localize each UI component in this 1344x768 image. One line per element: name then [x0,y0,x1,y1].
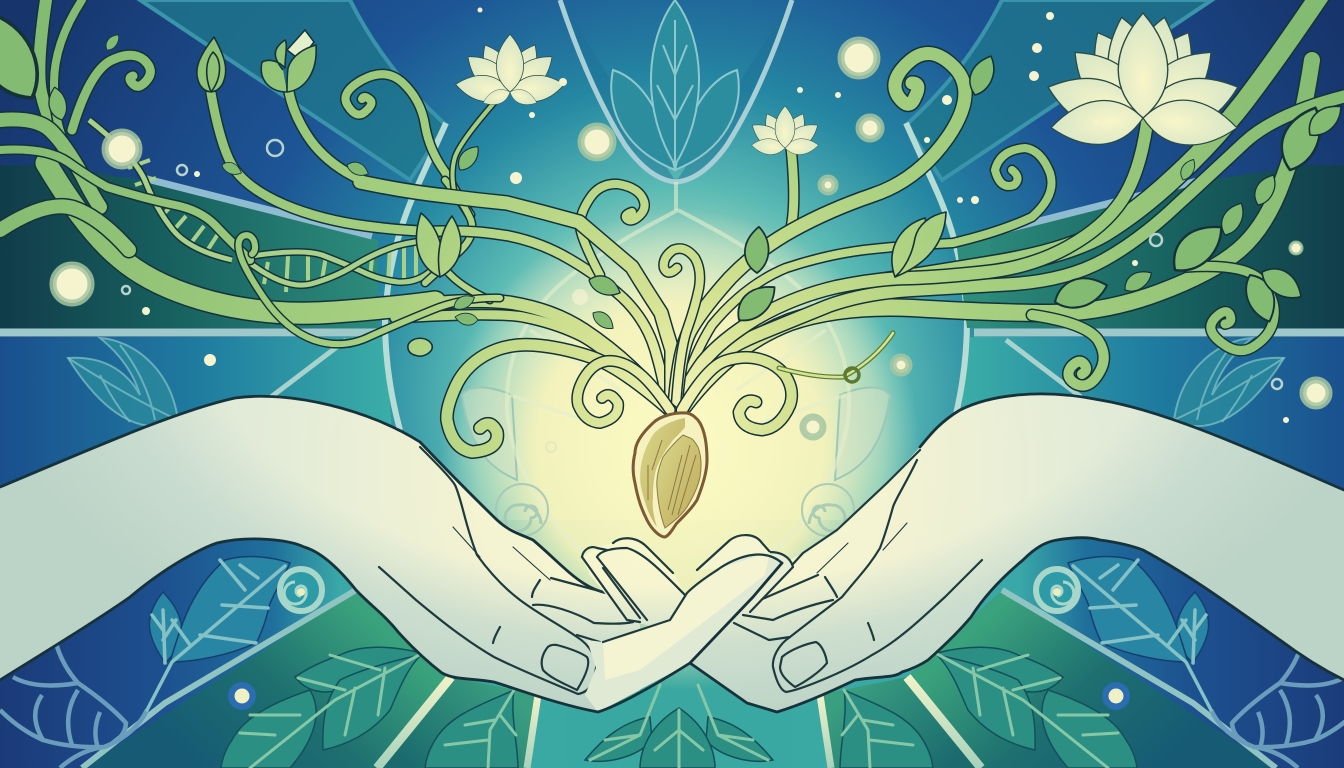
ornament: right spiral [802,484,854,536]
leaves: left pair [416,213,461,277]
pane: right band inner extension [956,232,990,328]
buds: closed flower buds [197,30,432,356]
ornament: left spiral [496,484,548,536]
glow: central light [425,150,935,710]
panels: upper stained glass panes, left half [0,0,676,540]
leaf: near center [585,685,660,761]
leaf: green leaf lower [425,690,518,768]
ornament: side panes [462,388,890,480]
pane: bottom field [0,520,679,768]
hand: left crossing fingers [0,535,793,712]
orb: blue halo [228,682,256,710]
flower: large lotus right [1041,12,1245,150]
hand: right palm, thumb and fingers [582,394,1344,712]
DNA helix [89,120,440,292]
pane: lower green field [82,590,451,768]
flower: small lotus left [454,34,566,109]
pane: lower blue band [0,337,400,540]
seed [633,413,707,537]
ornament: inner medallion [496,182,854,565]
panels: lower stained glass panes, left half [0,520,679,768]
leaves: right pair [892,212,946,277]
pane: lower teal field [377,677,540,768]
tendril: small right sprout [779,333,893,382]
pane dividers [82,590,538,768]
leaf: bottom center leaf and stem [640,668,715,768]
ornament: spiral [280,569,322,611]
pane: center arch line [385,123,446,430]
vines: outlined growing stems [0,0,1344,452]
leaves: on the vines [0,2,1344,333]
leaf: green leaf upper [221,647,421,768]
pane: teal ray top [140,0,446,180]
panels: lower panes, mirrored right half [679,520,1344,768]
light orbs [53,8,1329,437]
panels: upper panes, mirrored right half [676,0,1344,540]
flower: tiny lotus center [747,106,823,156]
pane: dark green band [0,165,378,328]
leaf: blue leaf pair [147,557,290,710]
leaf: left band blue leaf [68,338,178,426]
hand: left palm and thumb [0,396,640,712]
decoration: navy corner vines [0,643,147,768]
leaf: top center teal leaf [611,0,739,170]
